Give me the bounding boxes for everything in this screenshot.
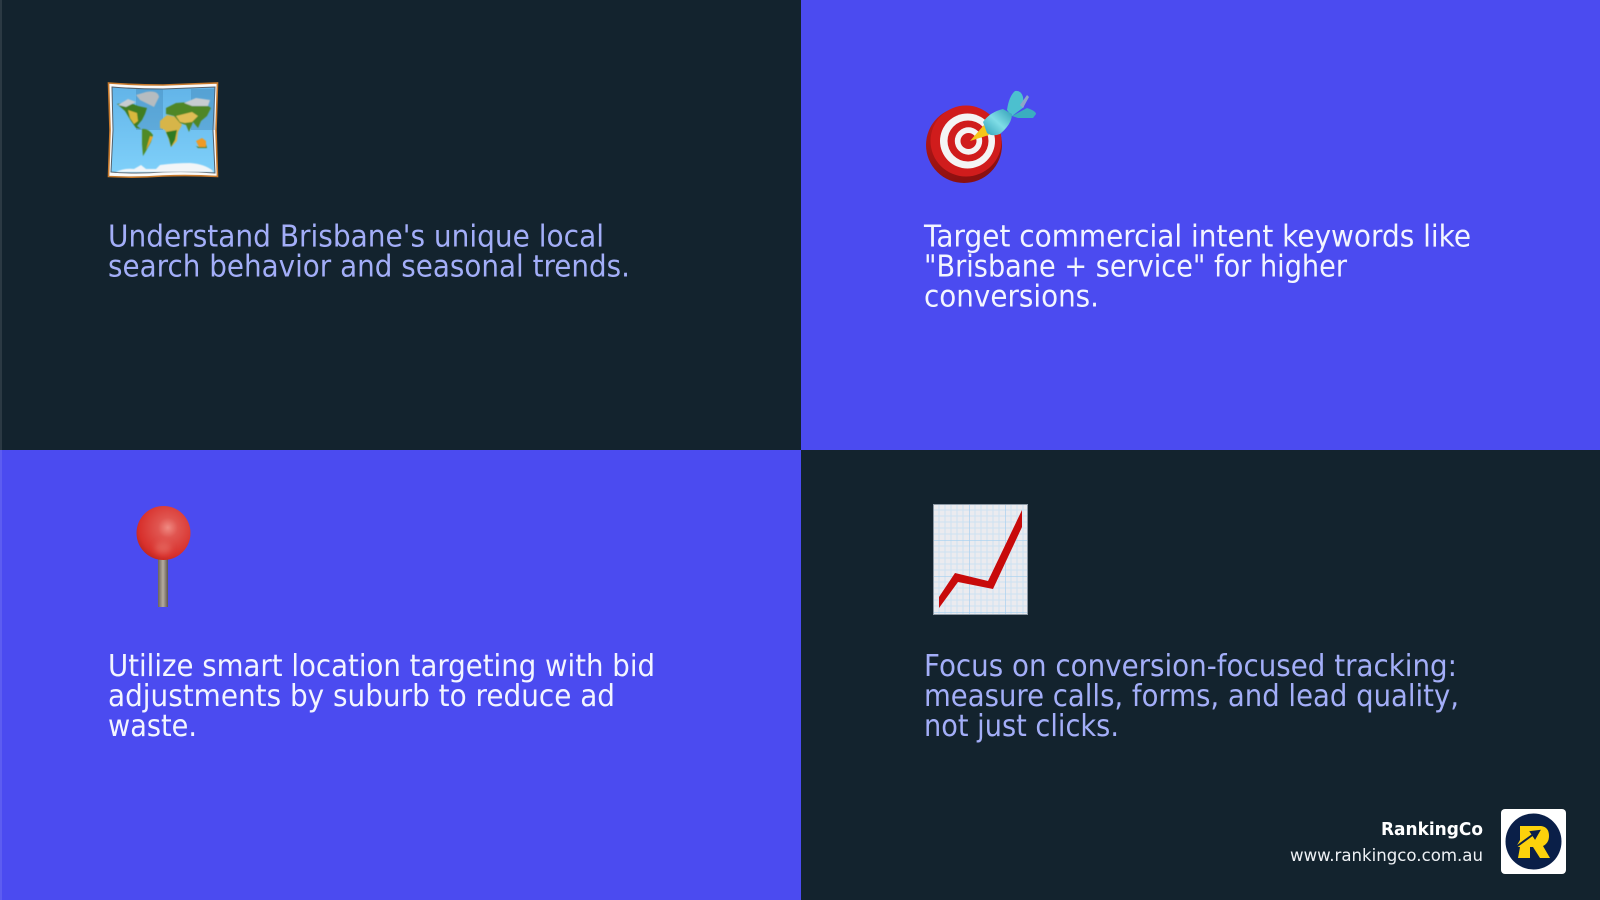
brand name: RankingCo xyxy=(1381,819,1483,840)
icon: dart hitting target xyxy=(926,91,1036,183)
text: location targeting xyxy=(108,649,655,744)
logo xyxy=(1501,809,1566,874)
icon: rising chart xyxy=(934,504,1028,614)
icon: world map xyxy=(108,83,218,177)
panel: local search behaviour xyxy=(0,0,801,450)
brand url: www.rankingco.com.au xyxy=(1290,846,1483,866)
panel: conversion tracking xyxy=(801,450,1600,900)
panel: commercial intent keywords xyxy=(801,0,1600,450)
panel: location targeting xyxy=(0,450,801,900)
text: commercial intent keywords: "Brisbane + service" for higher xyxy=(924,250,1348,284)
text: local search behaviour: search behavior and seasonal trends. xyxy=(108,250,630,284)
text: conversion tracking: Focus on conversion-focused tracking: xyxy=(924,649,1457,684)
text: commercial intent keywords: conversions. xyxy=(924,280,1099,314)
text: conversion tracking: measure calls, forms, and lead quality, xyxy=(924,679,1459,714)
text: conversion tracking: not just clicks. xyxy=(924,709,1119,744)
footer: brand xyxy=(1290,809,1566,874)
text: commercial intent keywords xyxy=(923,220,1471,314)
text: location targeting: waste. xyxy=(108,709,197,744)
text: location targeting: Utilize smart location targeting with bid xyxy=(108,649,655,684)
text: local search behaviour xyxy=(108,220,630,284)
text: local search behaviour: Understand Brisbane's unique local xyxy=(108,220,604,254)
text: location targeting: adjustments by suburb to reduce ad xyxy=(108,679,615,714)
text: conversion tracking xyxy=(924,649,1459,744)
icon: red map pin xyxy=(136,506,190,607)
text: commercial intent keywords: Target commercial intent keywords like xyxy=(923,220,1471,254)
